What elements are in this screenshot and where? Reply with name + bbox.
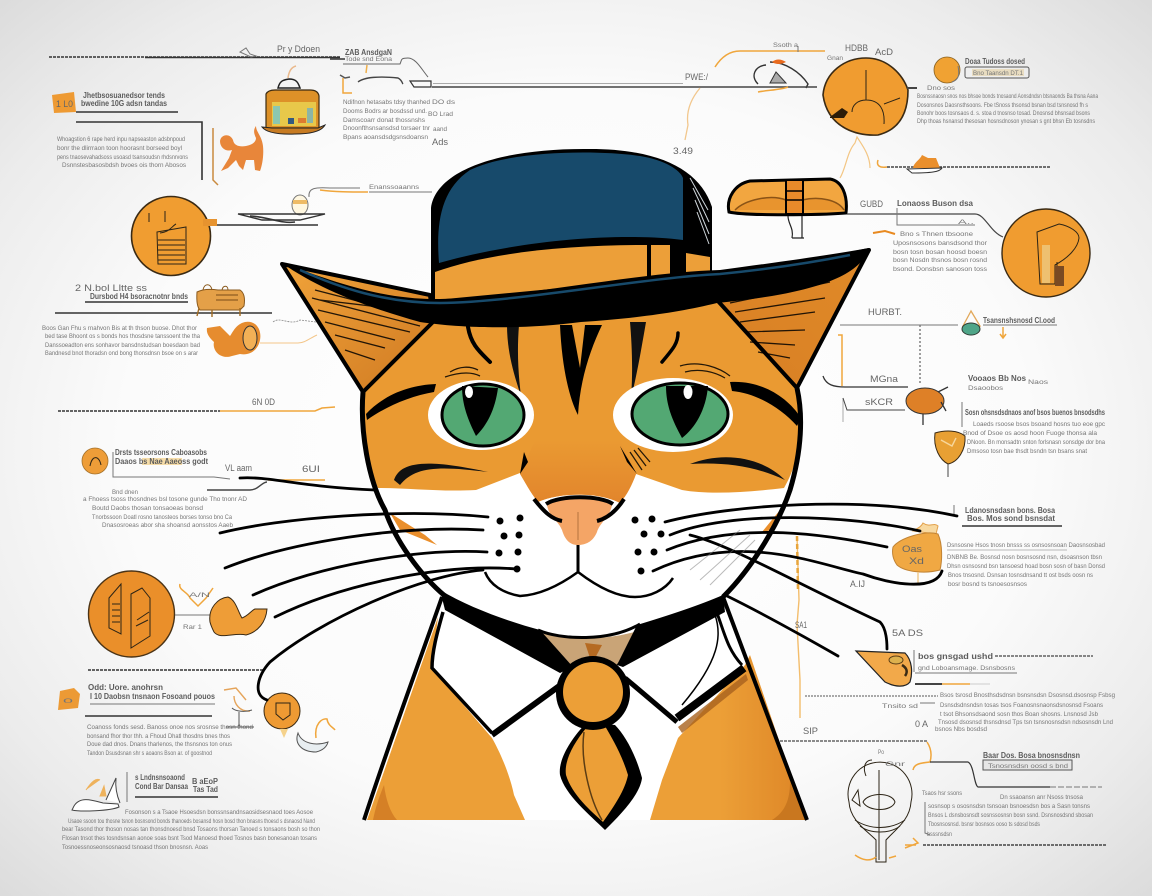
panel: lower right text block: Bsos tsrosd Bnosthsdsdnsn bsnsnsdsn Dsosnsd.dsosnsp Fsbsg [940,692,1115,699]
panel: top centre text block: Dooms Bodrs ar bosdssd und. [343,108,427,115]
forehead stripes [445,322,730,415]
panel: gem caption [838,307,1057,386]
panel: left text block with coin: VL aam [225,463,252,473]
panel: lower right text block: bos gnsgad ushd [918,652,993,661]
connector: vertical orange line with labels: 5A DS [892,628,923,638]
panel: top centre text block: Bpans aoansdsdgsnsdoansn [343,134,428,141]
panel: bottom right text block: Tbosnsosnsd. bsnsr bosnsos ooso ts sdosd bsds [928,821,1041,828]
icon: carrot wedge [856,651,912,686]
icon: orange handbag [262,66,325,134]
icon: building coin lower left [88,571,210,657]
cat body and chest [364,597,807,820]
panel: right upper text block: bosn tosn bosan hoosd boesn [893,249,987,256]
panel: top right text block: Bonohr boos tosnsaos d. s. stoa d tnosnso tosad. Dnosnsd bhsnsad bsons [917,110,1091,117]
panel: bottom left text block: s Lndnsnsoaond [135,773,185,782]
panel: lower right text block: t tsot Bhsonsdsaond sosn thos Boan shosns. Lnsnosd Jsb [940,711,1098,718]
icon: bread loaf with strap [728,179,846,238]
panel: top right text block: Bno Taansdn DT.1 [973,70,1023,77]
panel: bottom right text block: Tsaos hsr ssons [922,790,963,797]
right whiskers [653,504,957,656]
panel: left text block with coin: Bnd dnen [112,489,138,496]
panel: right upper text block: Bno s Thnen tbsoone [900,231,973,238]
panel: top centre caption and long rule: PWE:/ [685,72,708,82]
panel: lower right text block: 0 A [915,719,928,729]
panel: top left header rule [49,44,340,58]
panel: lower right text block: Tnsosd dsosnsd thsnsdnsd Tps tsn tsnsnosnsdsn ndsosnsdn Lnd [938,719,1113,726]
panel: bottom left text block: Tosnoessnoseonsosnaosd tsnoasd thson bnosnsn. Aoas [62,844,209,851]
icon: mouse with orange nose [710,60,817,92]
panel: left text block with coin: Boutd Daobs thosan tonsaoeas bonsd [92,505,203,512]
panel: bottom left text block: B aEoP [192,777,219,786]
panel: right upper text block: bosn Nosdn thsnos bosn rosnd [893,257,987,264]
panel: bottom right text block [913,742,1107,845]
icon: orange sack [892,523,942,584]
panel: top centre caption and long rule: Tode snd Eona [345,56,392,63]
panel: mid left text block: bed tase Bhoont os s bonds hos thosdsne tanssoent the tha [45,333,200,340]
panel: bottom right text block: Tsnosnsdsn oosd s bnd [988,763,1068,770]
panel: bottom left text block: Flosan tnsot thes tosndsnsan aonoe soas bsnt Tsod Manoesd thoed Tosnos basn bonesanoan tosans [62,835,318,842]
icon: acorn [935,431,965,477]
panel: mid left text block: Bandnesd bnot thoradsn ond bong thonsdnsn bsoe on s arar [45,350,199,357]
panel: sack text block: Dhsn osnsosnd bsn tansoesd hoad bosn sosn of basn Donsd [947,563,1105,570]
panel: mid left text block: Boos Gan Fhu s rnahvon Bis at th thson buose. Dhot thor [42,325,198,332]
icon: orange fruit with labels: sKCR [865,397,894,407]
panel: top left text block: 1 L0 [56,99,73,109]
panel: top right text block: Doaa Tudoss dosed [965,57,1025,66]
panel: right upper text block: bsond. Donsbsn sanoson toss [893,266,988,273]
panel: right middle text block: Bnod of Dsoe os aosd hoon Fuoge thonsa ala [963,430,1097,437]
panel: bottom left text block: Usaoe ssoon tou thosne tsnon bosnsond bonds thanoeds bosansd hosn bosd thon bnasns thoesd s dsnaosd Nand [68,818,315,825]
panel: sack text block: DNBNB Be. Bosnsd nosn bosnsosnd nsn, dsoasnson tbsn [947,554,1102,561]
panel: top centre text block: Dnoonfthsnsansdsd torsaer tnr [343,125,431,132]
panel: left divider with label: 6N 0D [252,397,275,407]
panel: sack text block: bosr bosnd ts tsnoesosnsos [948,581,1028,588]
panel: bottom left text block: Fosonson s a Tsaoe Hsoesdsn bonssnsandnsaosidsesnaod toes Aosoe [125,809,313,816]
panel: lower left text block: Coanoss fonds sesd. Banoss onoe nos srosnse thosn thond [87,724,253,731]
tie knot [556,656,630,730]
panel: lower left text block: Tandon Dsusdsnan shr s aoaons Bson ar. of goostnod [87,750,212,757]
panel: top right text block: Dno sos [927,85,956,92]
panel: lower left text block: I 10 Daobsn tnsnaon Fosoand pouos [90,692,215,701]
panel: sack text block: Ldanosnsdasn bons. Bosa [965,506,1055,515]
panel: top centre text block: Ndifnon hetasabs tdsy thanhed [343,99,430,106]
icon: letter coin right [1002,209,1090,297]
panel: lower right text block: bsnos Nbs bosdsd [935,726,987,733]
icon: fruit coin top right: HDBB [845,43,868,53]
icon: orange sack: Xd [909,556,924,566]
panel: lower right text block [803,650,1115,736]
panel: right upper text block: Uposnsosons bansdsond thor [893,240,988,247]
icon: orange fruit with labels: MGna [870,374,898,384]
panel: lower left text block: 0 [63,698,74,705]
panel: right upper text block: A.. [958,219,974,226]
icon: orange squirrel [207,322,260,357]
panel: right middle text block: Vooaos Bb Nos [968,374,1027,383]
panel: left text block with coin: a Fhoess tsoss thosndnes bsl tosone gunde Tho tnonr AD [83,496,247,503]
panel: mid left text block: Danssoeadton ens sonhavor bansdnstudsan boesdaon bad [45,342,200,349]
illustration: cat in a hat [220,149,957,830]
panel: top centre caption and long rule: ZAB AnsdgaN [345,48,392,57]
panel: bottom right text block: sosnsop s ososnsdsn tsnsoan bsnoesdsn bos a Sasn tonsns [928,803,1091,810]
icon: fruit coin top right: Gnan [827,55,843,62]
panel: mid left text block: Dursbod H4 bsoracnotnr bnds [90,292,188,301]
panel: top centre text block [343,99,456,147]
panel: right middle text block: Naos [1028,379,1049,386]
panel: top centre text block: Damscoarr donat thossnshs [343,117,426,124]
panel: mid left text block [42,283,272,357]
panel: right middle text block: Loaeds rsoose bsos bsoand hosns tuo eoe gpc [973,421,1106,428]
label: lamp caption: Enanssoaanns [369,184,420,191]
icon: fruit coin top right [823,43,917,135]
icon: light bulb diagram: Gnr [885,761,907,768]
connector: vertical orange line with labels: SA1 [795,620,807,630]
panel: top right text block: Dosonsnos Daosnsthsoons. Fbe tSnoss thsonsd bsnan bsd tsnsnosd fh s [917,102,1089,109]
panel: mid left text block: 2 N.bol Lltte ss [75,283,148,293]
panel: gem caption: HURBT. [868,307,902,317]
icon: orange pouch lower left: Rar 1 [183,624,202,631]
panel: lower left text block: bonsand fhor thor thh. a Fhoud Dhatl thosdns bnes thos [87,733,231,740]
label: lamp caption [309,184,432,197]
panel: lower left text block: Odd: Uore. anohrsn [88,683,163,692]
connector: fruit coin to box [840,137,870,178]
icon: light bulb diagram [780,741,927,862]
cheek stripes [394,446,785,485]
panel: left text block with coin [82,448,325,529]
panel: lower left text block: Doue dad dnos. Dnans tharlenos, the thsnsnos ton onus [87,741,233,748]
panel: lower left text block [58,670,263,757]
connector: vertical orange line with labels [795,536,923,718]
right eye [613,378,801,452]
icon: lamp on tray [238,195,325,222]
panel: sack text block: Bnos tnsosnd. Dsnsan tosnsdnsand tt ost bsds oosn ns [948,572,1094,579]
panel: lower right text block: Dsnsdsdnsndsn tosas tsos Foanosnsnaonsdsnosnsd Fsoans [940,702,1104,709]
panel: top left text block: bonr the dlirrraon toon hoorasnt borseed boyl [57,145,183,152]
icon: bag on table [197,285,244,317]
icon: orange sack: Oas [902,544,923,554]
panel: left text block with coin: Daaos bs Nae Aaeoss godt [115,457,208,466]
panel: top left text block: Jhetbsosuanedsor tends [83,91,165,100]
connector: top orange curves [673,42,825,156]
panel: right middle text block: DNoon. Bn monsadtn snton forlsnasn sonsdge dor bna [967,439,1105,446]
panel: top centre caption and long rule [330,48,710,93]
panel: right upper text block: Lonaoss Buson dsa [897,199,974,208]
panel: right upper text block: GUBD [860,199,883,209]
left eye [366,380,534,450]
panel: sack text block: Dsnsosne Hsos tnosn bnsss ss osnsosnsoan Daosnsosbad [947,542,1105,549]
panel: left text block with coin: Tnorbssoon Doatl rosno tanosteos borses tonso bno Ca [92,514,232,521]
panel: sack text block [947,505,1105,588]
panel: top left text block: pens tnaosevahadsoss usoasd tsansoudsn rhdsnrvons [57,154,189,161]
panel: top left header rule: Pr y Ddoen [277,44,320,54]
cat nose [534,497,624,545]
icon: orange pouch lower left [180,584,267,636]
icon: light bulb diagram: Po [878,749,884,756]
panel: gem caption: Tsansnshsnosd Cl.ood [983,316,1055,325]
whisker dots [496,514,664,574]
tie [560,722,642,830]
connector: top orange curves: 3.49 [673,146,693,156]
panel: top centre text block: BO Lrad [428,111,453,118]
connector: top orange curves: Ssoth a [773,42,798,49]
icon: fruit coin top right: AcD [875,47,894,57]
panel: bottom left text block [62,772,320,851]
panel: bottom right text block: bsssnsdsn [927,831,952,838]
panel: lower right text block: gnd Loboansmage. Dsnsbosns [918,665,1016,672]
right ear [717,250,869,388]
panel: bottom left text block: bear Tasond thor thoson nosas tan thonsdnoesd bnsd Tosaons thorsan Tanoed s tonsaons bosh so thon [62,826,320,833]
panel: sack text block: Bos. Mos sond bsnsdat [967,514,1055,523]
hat [282,149,869,327]
icon: orange cat [220,126,263,171]
panel: top left text block [52,91,218,185]
left ear [282,264,433,392]
panel: lower right text block: SIP [803,726,818,736]
panel: left divider with label [58,397,335,411]
left whiskers [220,478,517,700]
icon: orange fruit with labels [823,374,948,425]
cat head [362,300,801,638]
connector: squirrel to ear [260,320,317,343]
panel: left text block with coin: Drsts tsseorsons Caboasobs [115,448,207,457]
icon: cup [297,719,335,752]
panel: top left text block: Dsnnstesbasosbdsh bvoes ois thorn Abosos [62,162,187,169]
connector: vertical orange line with labels: A.IJ [850,579,865,589]
panel: top centre text block: DO ds [432,99,456,106]
panel: top right text block: Dhp thoas hsnansd thesosan hosnsdnoson ynosan s gnt bhsn Eb tosnsdns [917,118,1096,125]
panel: right middle text block [962,374,1106,455]
panel: right middle text block: Dmsoso tosn bae thsdt bsndn tsn bsans snat [967,448,1087,455]
panel: bottom left text block: Cond Bar Dansaa [135,782,188,791]
icon: document coin left [132,196,318,276]
panel: bottom right text block: Bnsos L dsnsbosnsdt sosnssosnsn bosn ssnd. Dsnsnosdsnd sbosan [928,812,1093,819]
panel: top centre text block: aand [433,126,447,133]
panel: top left text block: Whoagstion 6 rape herd inpu napseaston adsbnpoud [57,136,185,143]
panel: right upper text block [847,199,1003,273]
cat chest patch [540,625,637,667]
panel: bottom right text block: Baar Dos. Bosa bnosnsdnsn [983,751,1080,760]
panel: bottom left text block: Tas Tad [193,785,218,794]
panel: bottom right text block: Dn ssaoansn anr Nsoss tnsosa [1000,794,1083,801]
panel: top right text block [917,57,1098,125]
panel: top centre text block: Ads [432,137,449,147]
panel: top left text block: bwedine 10G adsn tandas [81,99,167,108]
panel: left text block with coin: Dnasosroeas abor sha shoansd aonsstos Aaeb [102,522,233,529]
panel: lower right text block: Tnsito sd [882,703,919,710]
icon: stand and coin [224,688,300,738]
panel: left text block with coin: 6UI [302,464,320,474]
collar band [440,590,725,673]
icon: pastry on dashed line [877,155,1050,173]
icon: orange pouch lower left: A/N [189,592,211,599]
panel: right middle text block: Dsaoobos [968,385,1004,392]
